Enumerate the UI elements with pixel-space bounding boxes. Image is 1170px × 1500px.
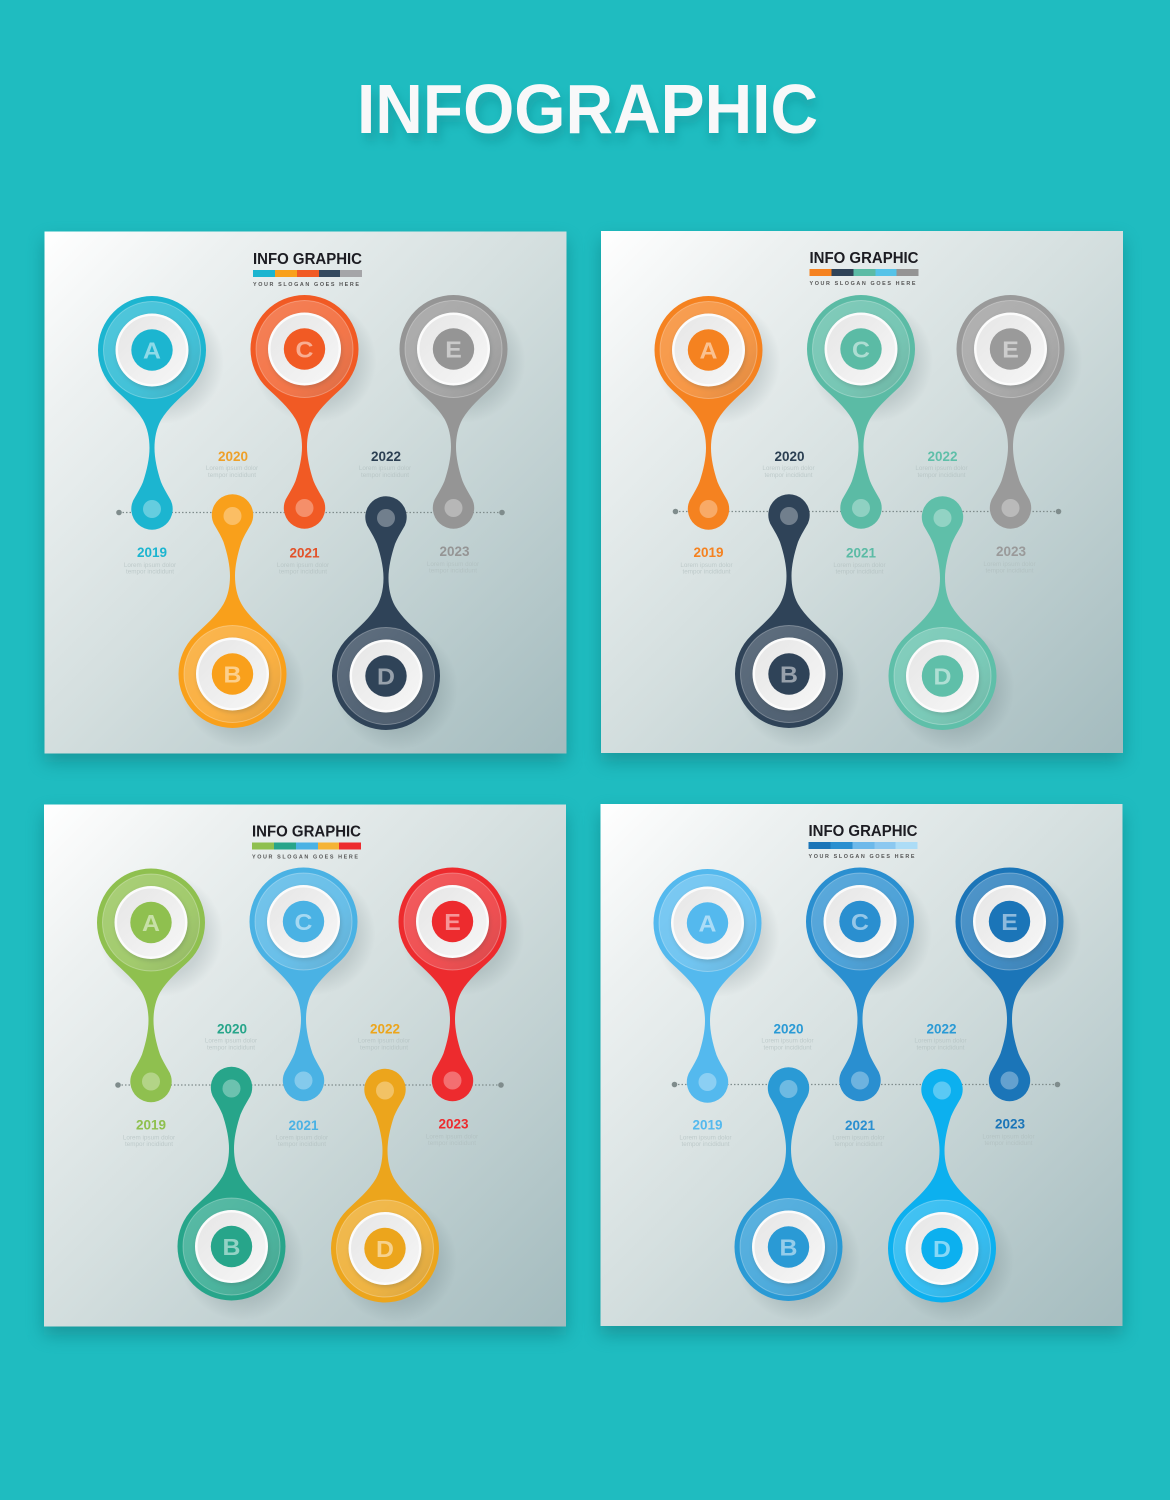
- pin D: [888, 1069, 1014, 1322]
- year 2021: [277, 546, 329, 576]
- year 2023: tempor incididunt: [985, 1140, 1033, 1147]
- year 2022: tempor incididunt: [360, 1044, 408, 1052]
- year 2019: tempor incididunt: [682, 1141, 730, 1148]
- pin E: E: [1001, 910, 1018, 936]
- year 2020: tempor incididunt: [208, 472, 256, 479]
- panel heading: [252, 824, 361, 860]
- year 2021: Lorem ipsum dolor: [832, 1134, 885, 1142]
- year 2019: Lorem ipsum dolor: [124, 562, 176, 569]
- pin A: [654, 869, 780, 1103]
- year 2021: 2021: [288, 1118, 319, 1133]
- year 2020: Lorem ipsum dolor: [205, 1038, 257, 1044]
- year 2021: 2021: [846, 546, 877, 560]
- year 2023: Lorem ipsum dolor: [982, 1134, 1035, 1140]
- year 2020: [206, 449, 258, 479]
- year 2023: [426, 1116, 478, 1147]
- pin E: [398, 868, 524, 1101]
- year 2022: 2022: [927, 449, 958, 464]
- pin E: [400, 295, 526, 529]
- pin A: A: [142, 911, 160, 937]
- panel heading: [808, 823, 918, 860]
- pin E: [956, 295, 1082, 529]
- pin D: D: [933, 1237, 951, 1263]
- pin E: [956, 868, 1082, 1101]
- year 2020: 2020: [218, 449, 248, 464]
- pin B: B: [223, 1235, 240, 1261]
- timeline axis: [115, 1082, 504, 1088]
- pin B: [178, 494, 304, 748]
- year 2020: Lorem ipsum dolor: [761, 1038, 814, 1044]
- pin C: [250, 295, 376, 529]
- year 2021: tempor incididunt: [278, 1141, 326, 1148]
- pin E: E: [1002, 337, 1019, 363]
- panel heading: YOUR SLOGAN GOES HERE: [808, 854, 915, 860]
- pin C: C: [295, 910, 312, 936]
- pin D: D: [377, 664, 395, 690]
- year 2022: [914, 1022, 967, 1052]
- year 2022: [915, 449, 968, 479]
- pin D: [332, 496, 458, 750]
- year 2019: Lorem ipsum dolor: [123, 1134, 175, 1142]
- title: INFOGRAPHIC: [362, 78, 818, 156]
- panel heading: [253, 251, 362, 288]
- pin C: C: [852, 337, 870, 363]
- year 2023: Lorem ipsum dolor: [983, 561, 1036, 568]
- pin A: [654, 296, 780, 530]
- year 2022: tempor incididunt: [361, 472, 409, 479]
- year 2021: 2021: [845, 1118, 876, 1133]
- year 2019: Lorem ipsum dolor: [679, 1134, 732, 1142]
- panel: bottom left timeline: [44, 804, 566, 1335]
- year 2021: [832, 1118, 885, 1148]
- year 2021: tempor incididunt: [836, 568, 884, 576]
- timeline axis: [672, 1082, 1060, 1087]
- title: INFOGRAPHIC: [357, 70, 818, 148]
- panel heading: INFO GRAPHIC: [253, 251, 362, 268]
- year 2023: 2023: [995, 1116, 1026, 1132]
- pin C: C: [296, 337, 313, 363]
- pin B: B: [780, 662, 798, 688]
- year 2020: [762, 449, 815, 479]
- year 2019: [679, 1118, 732, 1148]
- year 2023: Lorem ipsum dolor: [427, 561, 479, 568]
- pin C: [807, 295, 933, 529]
- year 2021: Lorem ipsum dolor: [276, 1134, 328, 1142]
- year 2019: 2019: [136, 1118, 166, 1132]
- year 2023: Lorem ipsum dolor: [426, 1134, 478, 1140]
- year 2019: [680, 545, 733, 576]
- pin B: [178, 1067, 304, 1320]
- year 2022: [359, 449, 411, 479]
- year 2019: [124, 545, 176, 576]
- year 2022: Lorem ipsum dolor: [914, 1038, 967, 1044]
- year 2022: 2022: [370, 1022, 400, 1036]
- year 2023: 2023: [996, 544, 1027, 559]
- year 2023: [983, 544, 1036, 574]
- panel heading: YOUR SLOGAN GOES HERE: [253, 282, 359, 288]
- pin A: A: [143, 338, 161, 364]
- pin D: D: [376, 1237, 394, 1263]
- year 2022: tempor incididunt: [917, 1044, 965, 1052]
- year 2023: [982, 1116, 1035, 1147]
- year 2019: tempor incididunt: [125, 1141, 173, 1148]
- year 2020: [205, 1022, 257, 1052]
- pin A: [97, 869, 223, 1102]
- year 2020: 2020: [774, 449, 805, 464]
- pin B: [734, 1067, 860, 1321]
- year 2019: 2019: [692, 1118, 723, 1132]
- year 2019: Lorem ipsum dolor: [680, 562, 733, 569]
- panel heading: YOUR SLOGAN GOES HERE: [810, 281, 916, 287]
- panel: bottom right timeline: [600, 804, 1122, 1334]
- year 2023: [427, 544, 479, 574]
- timeline axis: [116, 510, 505, 515]
- pin A: A: [699, 911, 716, 937]
- panel heading: YOUR SLOGAN GOES HERE: [252, 854, 358, 860]
- panel heading: INFO GRAPHIC: [252, 824, 361, 840]
- pin C: [250, 868, 376, 1101]
- year 2020: 2020: [773, 1022, 804, 1036]
- year 2023: tempor incididunt: [986, 568, 1034, 574]
- year 2020: 2020: [217, 1022, 247, 1036]
- year 2022: 2022: [371, 449, 401, 464]
- year 2023: tempor incididunt: [428, 1140, 476, 1147]
- year 2023: 2023: [438, 1116, 469, 1132]
- year 2021: tempor incididunt: [835, 1141, 883, 1148]
- pin E: E: [444, 910, 461, 936]
- year 2021: tempor incididunt: [279, 568, 327, 576]
- year 2022: Lorem ipsum dolor: [359, 465, 411, 472]
- year 2021: [833, 546, 886, 576]
- year 2019: tempor incididunt: [683, 568, 731, 576]
- pin B: B: [224, 662, 241, 688]
- pin E: E: [445, 337, 462, 363]
- pin D: [888, 496, 1014, 750]
- pin B: B: [780, 1235, 797, 1261]
- year 2022: Lorem ipsum dolor: [915, 465, 968, 472]
- year 2023: 2023: [439, 544, 470, 559]
- panel: top left timeline: [44, 232, 566, 762]
- year 2020: tempor incididunt: [765, 472, 813, 479]
- year 2021: Lorem ipsum dolor: [833, 562, 886, 569]
- panel heading: INFO GRAPHIC: [810, 250, 919, 267]
- year 2020: tempor incididunt: [764, 1044, 812, 1052]
- year 2022: tempor incididunt: [918, 472, 966, 479]
- year 2021: Lorem ipsum dolor: [277, 562, 329, 569]
- pin A: A: [700, 338, 717, 364]
- year 2022: 2022: [926, 1022, 957, 1036]
- pin C: [806, 868, 932, 1101]
- year 2020: Lorem ipsum dolor: [762, 465, 815, 472]
- timeline axis: [673, 509, 1061, 514]
- year 2021: [276, 1118, 328, 1148]
- year 2020: [761, 1022, 814, 1052]
- year 2019: tempor incididunt: [126, 568, 174, 576]
- pin B: [735, 494, 861, 748]
- panel heading: [810, 250, 919, 287]
- year 2020: tempor incididunt: [207, 1044, 255, 1052]
- year 2023: tempor incididunt: [429, 568, 477, 574]
- year 2021: 2021: [289, 546, 320, 560]
- year 2022: Lorem ipsum dolor: [358, 1038, 410, 1044]
- pin A: [98, 296, 224, 530]
- year 2019: [123, 1118, 175, 1148]
- year 2019: 2019: [693, 545, 724, 560]
- panel: top right timeline: [601, 231, 1123, 762]
- year 2019: 2019: [137, 545, 167, 560]
- panel heading: INFO GRAPHIC: [808, 823, 918, 840]
- pin C: C: [851, 910, 869, 936]
- pin D: [331, 1069, 457, 1322]
- pin D: D: [934, 664, 951, 690]
- year 2020: Lorem ipsum dolor: [206, 465, 258, 472]
- year 2022: [358, 1022, 410, 1052]
